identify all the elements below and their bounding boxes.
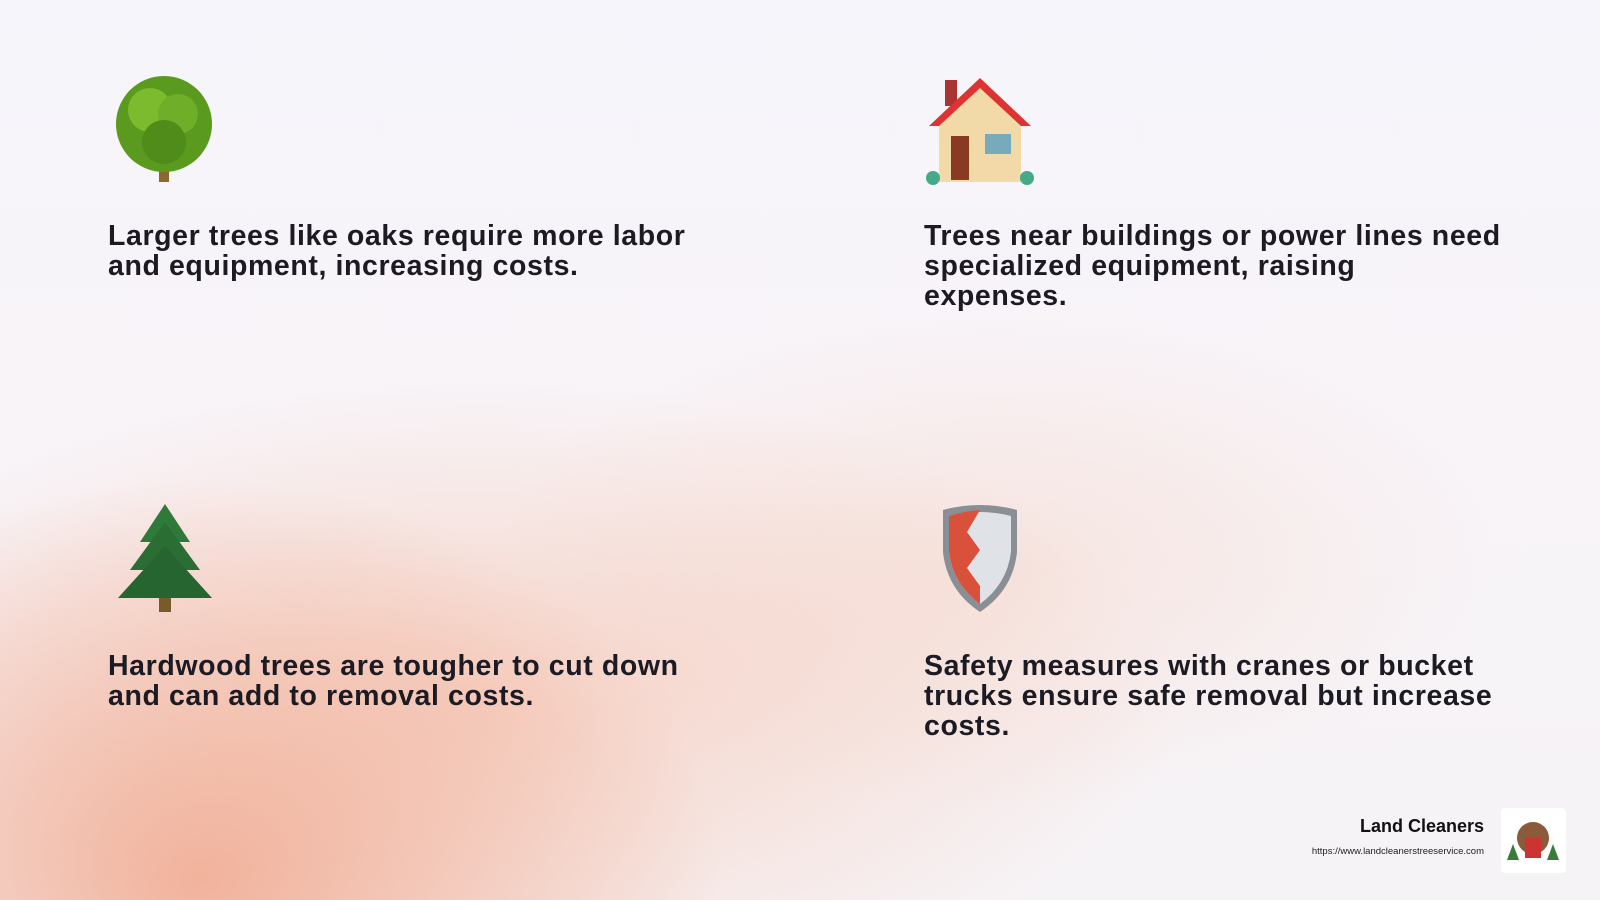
text: safety: Safety measures with cranes or bucket [924,650,1474,682]
icon: tree [116,76,212,182]
logo [1501,808,1566,873]
text: trees near buildings [924,220,1501,312]
text: trees near buildings: expenses. [924,280,1067,312]
brand url: https://www.landcleanerstreeservice.com [1312,846,1484,857]
text: larger trees: and equipment, increasing costs. [108,250,579,282]
brand block [1312,808,1566,873]
icon: pine tree [118,504,212,612]
text: larger trees [108,220,685,282]
text: trees near buildings: Trees near buildings or power lines need [924,220,1501,252]
icon: shield [943,505,1017,612]
text: trees near buildings: specialized equipment, raising [924,250,1355,282]
brand name: Land Cleaners [1360,816,1484,836]
text: larger trees: Larger trees like oaks require more labor [108,220,685,252]
text: hardwood [108,650,679,712]
text: safety: costs. [924,710,1010,742]
text: hardwood: and can add to removal costs. [108,680,534,712]
icon: house [926,78,1034,185]
text: hardwood: Hardwood trees are tougher to cut down [108,650,679,682]
text: safety: trucks ensure safe removal but increase [924,680,1492,712]
text: safety [924,650,1492,742]
